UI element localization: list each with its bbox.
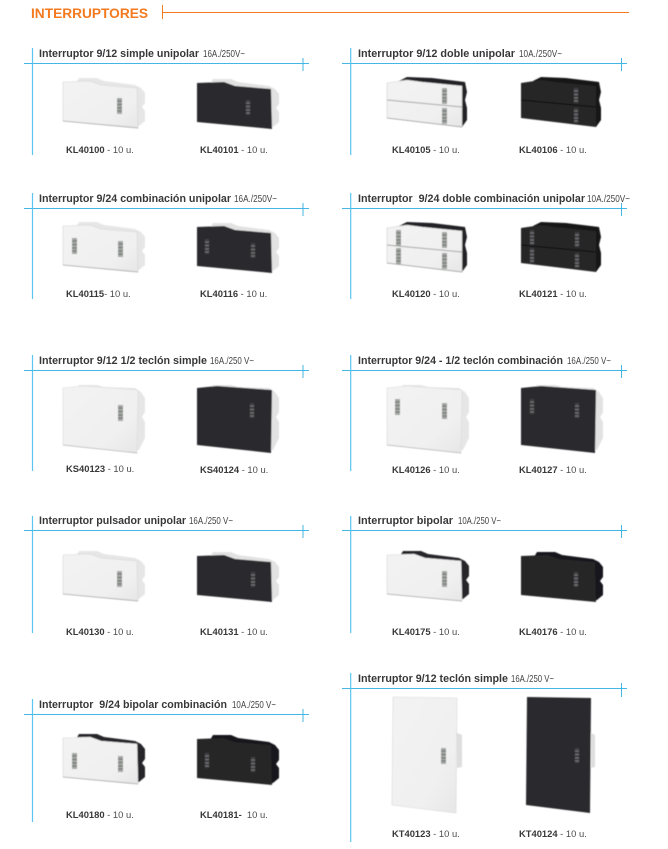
icon: black half-key switch bbox=[197, 385, 279, 453]
rating: 16A./250 V~ bbox=[189, 515, 233, 527]
panel: Interruptor pulsador unipolar bbox=[24, 515, 309, 637]
code KL40131: KL40131 - 10 u. bbox=[200, 626, 268, 637]
heading: Interruptor bipolar bbox=[358, 515, 453, 527]
icon: white combination switch bbox=[63, 222, 145, 272]
heading: Interruptor 9/12 simple unipolar bbox=[39, 48, 199, 60]
panel: Interruptor 9/12 1/2 teclón simple bbox=[24, 355, 309, 475]
icon: black half-key combination switch bbox=[521, 385, 603, 453]
heading: Interruptor 9/12 teclón simple bbox=[358, 673, 508, 685]
icon: black push-button switch bbox=[197, 552, 279, 602]
heading: Interruptor pulsador unipolar bbox=[39, 515, 186, 527]
code KL40175: KL40175 - 10 u. bbox=[392, 626, 460, 637]
panel: Interruptor 9/24 - 1/2 teclón combinación bbox=[342, 355, 627, 475]
rating: 16A./250V~ bbox=[234, 193, 277, 205]
panel: Interruptor 9/24 bipolar combinación bbox=[24, 699, 309, 822]
rating: 10A./250 V~ bbox=[232, 699, 276, 711]
panel: Interruptor 9/12 doble unipolar bbox=[342, 48, 627, 155]
panel: Interruptor 9/12 simple unipolar bbox=[24, 48, 309, 155]
code KL40116: KL40116 - 10 u. bbox=[200, 288, 267, 299]
icon: black full-plate switch bbox=[526, 697, 595, 813]
rating: 16A./250 V~ bbox=[567, 355, 611, 367]
panel: Interruptor bipolar bbox=[342, 515, 627, 637]
code KL40181: KL40181- 10 u. bbox=[200, 809, 268, 820]
icon: black switch bbox=[197, 79, 279, 129]
icon: black bipolar switch bbox=[521, 552, 603, 602]
code KL40121: KL40121 - 10 u. bbox=[519, 288, 587, 299]
code KL40180: KL40180 - 10 u. bbox=[66, 809, 134, 820]
icon: white double switch bbox=[387, 77, 467, 127]
heading: Interruptor 9/12 doble unipolar bbox=[358, 48, 515, 60]
icon: black combination switch bbox=[197, 223, 279, 273]
code KT40124: KT40124 - 10 u. bbox=[519, 828, 587, 839]
code KL40106: KL40106 - 10 u. bbox=[519, 144, 587, 155]
heading: Interruptor 9/24 doble combinación unipolar bbox=[358, 193, 585, 205]
code KL40176: KL40176 - 10 u. bbox=[519, 626, 587, 637]
icon: black double combination switch bbox=[521, 222, 601, 272]
code KL40120: KL40120 - 10 u. bbox=[392, 288, 460, 299]
panel: Interruptor 9/24 combinación unipolar bbox=[24, 193, 309, 299]
rating: 16A./250 V~ bbox=[511, 673, 554, 685]
code KL40105: KL40105 - 10 u. bbox=[392, 144, 460, 155]
icon: white switch bbox=[63, 78, 145, 128]
icon: white double combination switch bbox=[387, 222, 467, 272]
heading: Interruptor 9/24 bipolar combinación bbox=[39, 699, 227, 711]
icon: white bipolar combination switch bbox=[63, 734, 145, 784]
heading: Interruptor 9/24 combinación unipolar bbox=[39, 193, 231, 205]
code KS40124: KS40124 - 10 u. bbox=[200, 464, 268, 475]
icon: white push-button switch bbox=[63, 551, 145, 601]
code KL40100: KL40100 - 10 u. bbox=[66, 144, 134, 155]
code KL40101: KL40101 - 10 u. bbox=[200, 144, 268, 155]
code KL40127: KL40127 - 10 u. bbox=[519, 464, 587, 475]
icon: white bipolar switch bbox=[387, 551, 469, 601]
rating: 10A./250V~ bbox=[587, 193, 630, 205]
code KS40123: KS40123 - 10 u. bbox=[66, 463, 134, 474]
icon: black double switch bbox=[521, 77, 601, 127]
panel: Interruptor 9/24 doble combinación unipolar bbox=[342, 193, 630, 299]
code KL40126: KL40126 - 10 u. bbox=[392, 464, 460, 475]
heading: Interruptor 9/24 - 1/2 teclón combinación bbox=[358, 355, 563, 367]
rating: 16A./250V~ bbox=[203, 48, 245, 60]
rating: 16A./250 V~ bbox=[210, 355, 254, 367]
title: INTERRUPTORES bbox=[31, 6, 148, 21]
heading: Interruptor 9/12 1/2 teclón simple bbox=[39, 355, 207, 367]
rating: 10A./250 V~ bbox=[458, 515, 501, 527]
rating: 10A./250V~ bbox=[519, 48, 562, 60]
icon: white half-key switch bbox=[63, 385, 145, 453]
header: INTERRUPTORES bbox=[31, 5, 629, 21]
panel: Interruptor 9/12 teclón simple bbox=[342, 673, 627, 842]
code KL40130: KL40130 - 10 u. bbox=[66, 626, 134, 637]
icon: white full-plate switch bbox=[392, 697, 462, 813]
code KL40115: KL40115- 10 u. bbox=[66, 288, 131, 299]
icon: white half-key combination switch bbox=[387, 385, 469, 453]
header rule bbox=[162, 5, 629, 19]
code KT40123: KT40123 - 10 u. bbox=[392, 828, 460, 839]
icon: black bipolar combination switch bbox=[197, 735, 279, 785]
